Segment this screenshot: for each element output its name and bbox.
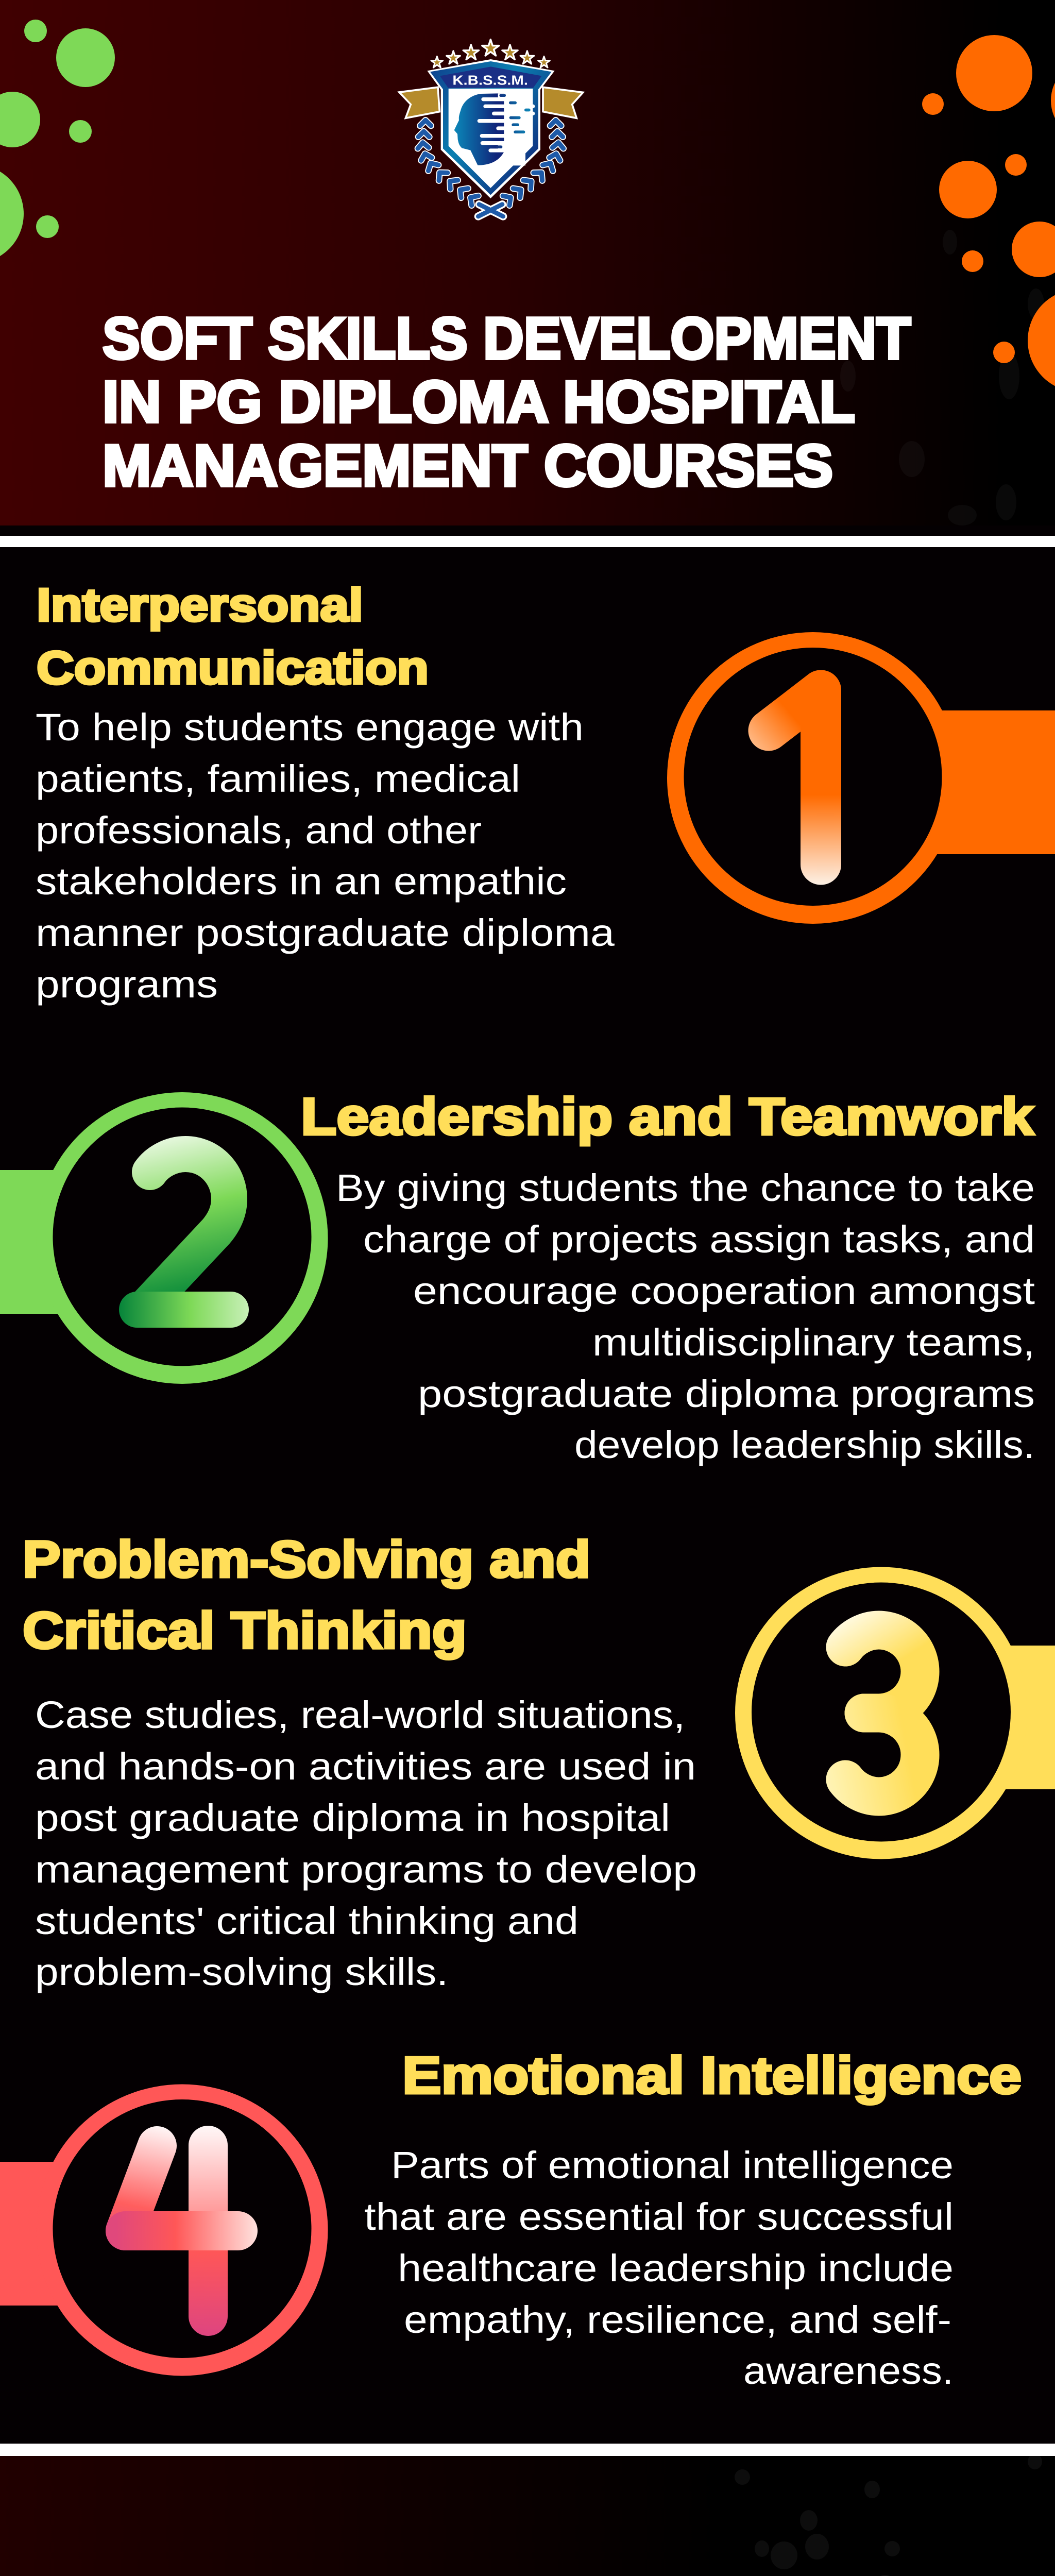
logo shield xyxy=(427,59,555,198)
section 2 body text: postgraduate diploma programs xyxy=(418,1372,1035,1415)
section 3 heading: Problem-Solving and xyxy=(23,1531,590,1588)
panel: header xyxy=(0,0,1055,526)
section 3 body text: post graduate diploma in hospital xyxy=(35,1797,670,1839)
section 3 body text: students' critical thinking and xyxy=(35,1900,578,1942)
section 1 heading: Communication xyxy=(37,642,429,694)
orange decorative circles xyxy=(922,35,1055,392)
section 1 body text: To help students engage with xyxy=(36,706,584,749)
section 3 heading xyxy=(23,1531,590,1659)
section 4 body text: that are essential for successful xyxy=(364,2195,954,2238)
logo wreath underlay xyxy=(417,120,564,216)
icon: number 3 badge xyxy=(735,1567,1055,1859)
section 1 body text: manner postgraduate diploma xyxy=(36,911,615,954)
panel: section 4 xyxy=(0,2047,1022,2392)
section 4 body text: healthcare leadership include xyxy=(398,2247,954,2290)
top white divider xyxy=(0,536,1055,547)
section 1 body text: stakeholders in an empathic xyxy=(36,860,567,903)
section 4 body text: awareness. xyxy=(743,2349,954,2392)
logo name: K.B.S.S.M. xyxy=(452,72,528,88)
panel: section 1 xyxy=(36,580,1055,1006)
icon: number 2 badge xyxy=(0,1092,328,1384)
logo wreath leaves xyxy=(417,120,564,216)
section 2 body text: multidisciplinary teams, xyxy=(592,1321,1035,1364)
section 2 body text: develop leadership skills. xyxy=(574,1423,1035,1466)
section 3 body text: management programs to develop xyxy=(35,1848,697,1891)
section 3 body text: problem-solving skills. xyxy=(35,1951,448,1993)
title: SOFT SKILLS DEVELOPMENT xyxy=(103,306,911,371)
section 4 body text xyxy=(364,2144,954,2392)
logo ribbons xyxy=(399,87,583,118)
panel: section 3 xyxy=(23,1531,1055,1993)
section 2 body text xyxy=(336,1166,1035,1466)
title xyxy=(103,306,911,499)
icon: K.B.S.S.M. logo xyxy=(399,40,583,216)
section 4 body text: empathy, resilience, and self- xyxy=(404,2298,951,2341)
section 2 body text: encourage cooperation amongst xyxy=(413,1269,1035,1312)
section 3 body text xyxy=(35,1693,697,1993)
section 3 body text: and hands-on activities are used in xyxy=(35,1745,696,1788)
section 1 body text: programs xyxy=(36,963,218,1006)
section 1 heading: Interpersonal xyxy=(37,580,363,631)
green decorative circles xyxy=(0,20,115,263)
section 4 heading: Emotional Intelligence xyxy=(402,2047,1022,2105)
faint background blotches xyxy=(840,230,1044,526)
panel: footer band xyxy=(0,2454,1055,2576)
bottom white divider xyxy=(0,2444,1055,2456)
icon: number 1 badge xyxy=(667,632,1055,924)
section 2 body text: By giving students the chance to take xyxy=(336,1166,1035,1209)
section 3 heading: Critical Thinking xyxy=(23,1602,467,1659)
icon: number 4 badge xyxy=(0,2084,328,2376)
panel: section 2 xyxy=(0,1088,1035,1466)
section 4 body text: Parts of emotional intelligence xyxy=(391,2144,954,2187)
title: IN PG DIPLOMA HOSPITAL xyxy=(103,369,855,435)
section 1 body text: patients, families, medical xyxy=(36,757,520,800)
section 1 body text: professionals, and other xyxy=(36,809,482,852)
logo head profile xyxy=(454,93,535,165)
section 1 heading xyxy=(37,580,429,694)
title: MANAGEMENT COURSES xyxy=(103,433,833,499)
section 3 body text: Case studies, real-world situations, xyxy=(35,1693,685,1736)
section 2 heading: Leadership and Teamwork xyxy=(301,1088,1034,1146)
section 2 body text: charge of projects assign tasks, and xyxy=(363,1218,1035,1261)
logo stars xyxy=(431,40,550,67)
section 1 body text xyxy=(36,706,615,1006)
